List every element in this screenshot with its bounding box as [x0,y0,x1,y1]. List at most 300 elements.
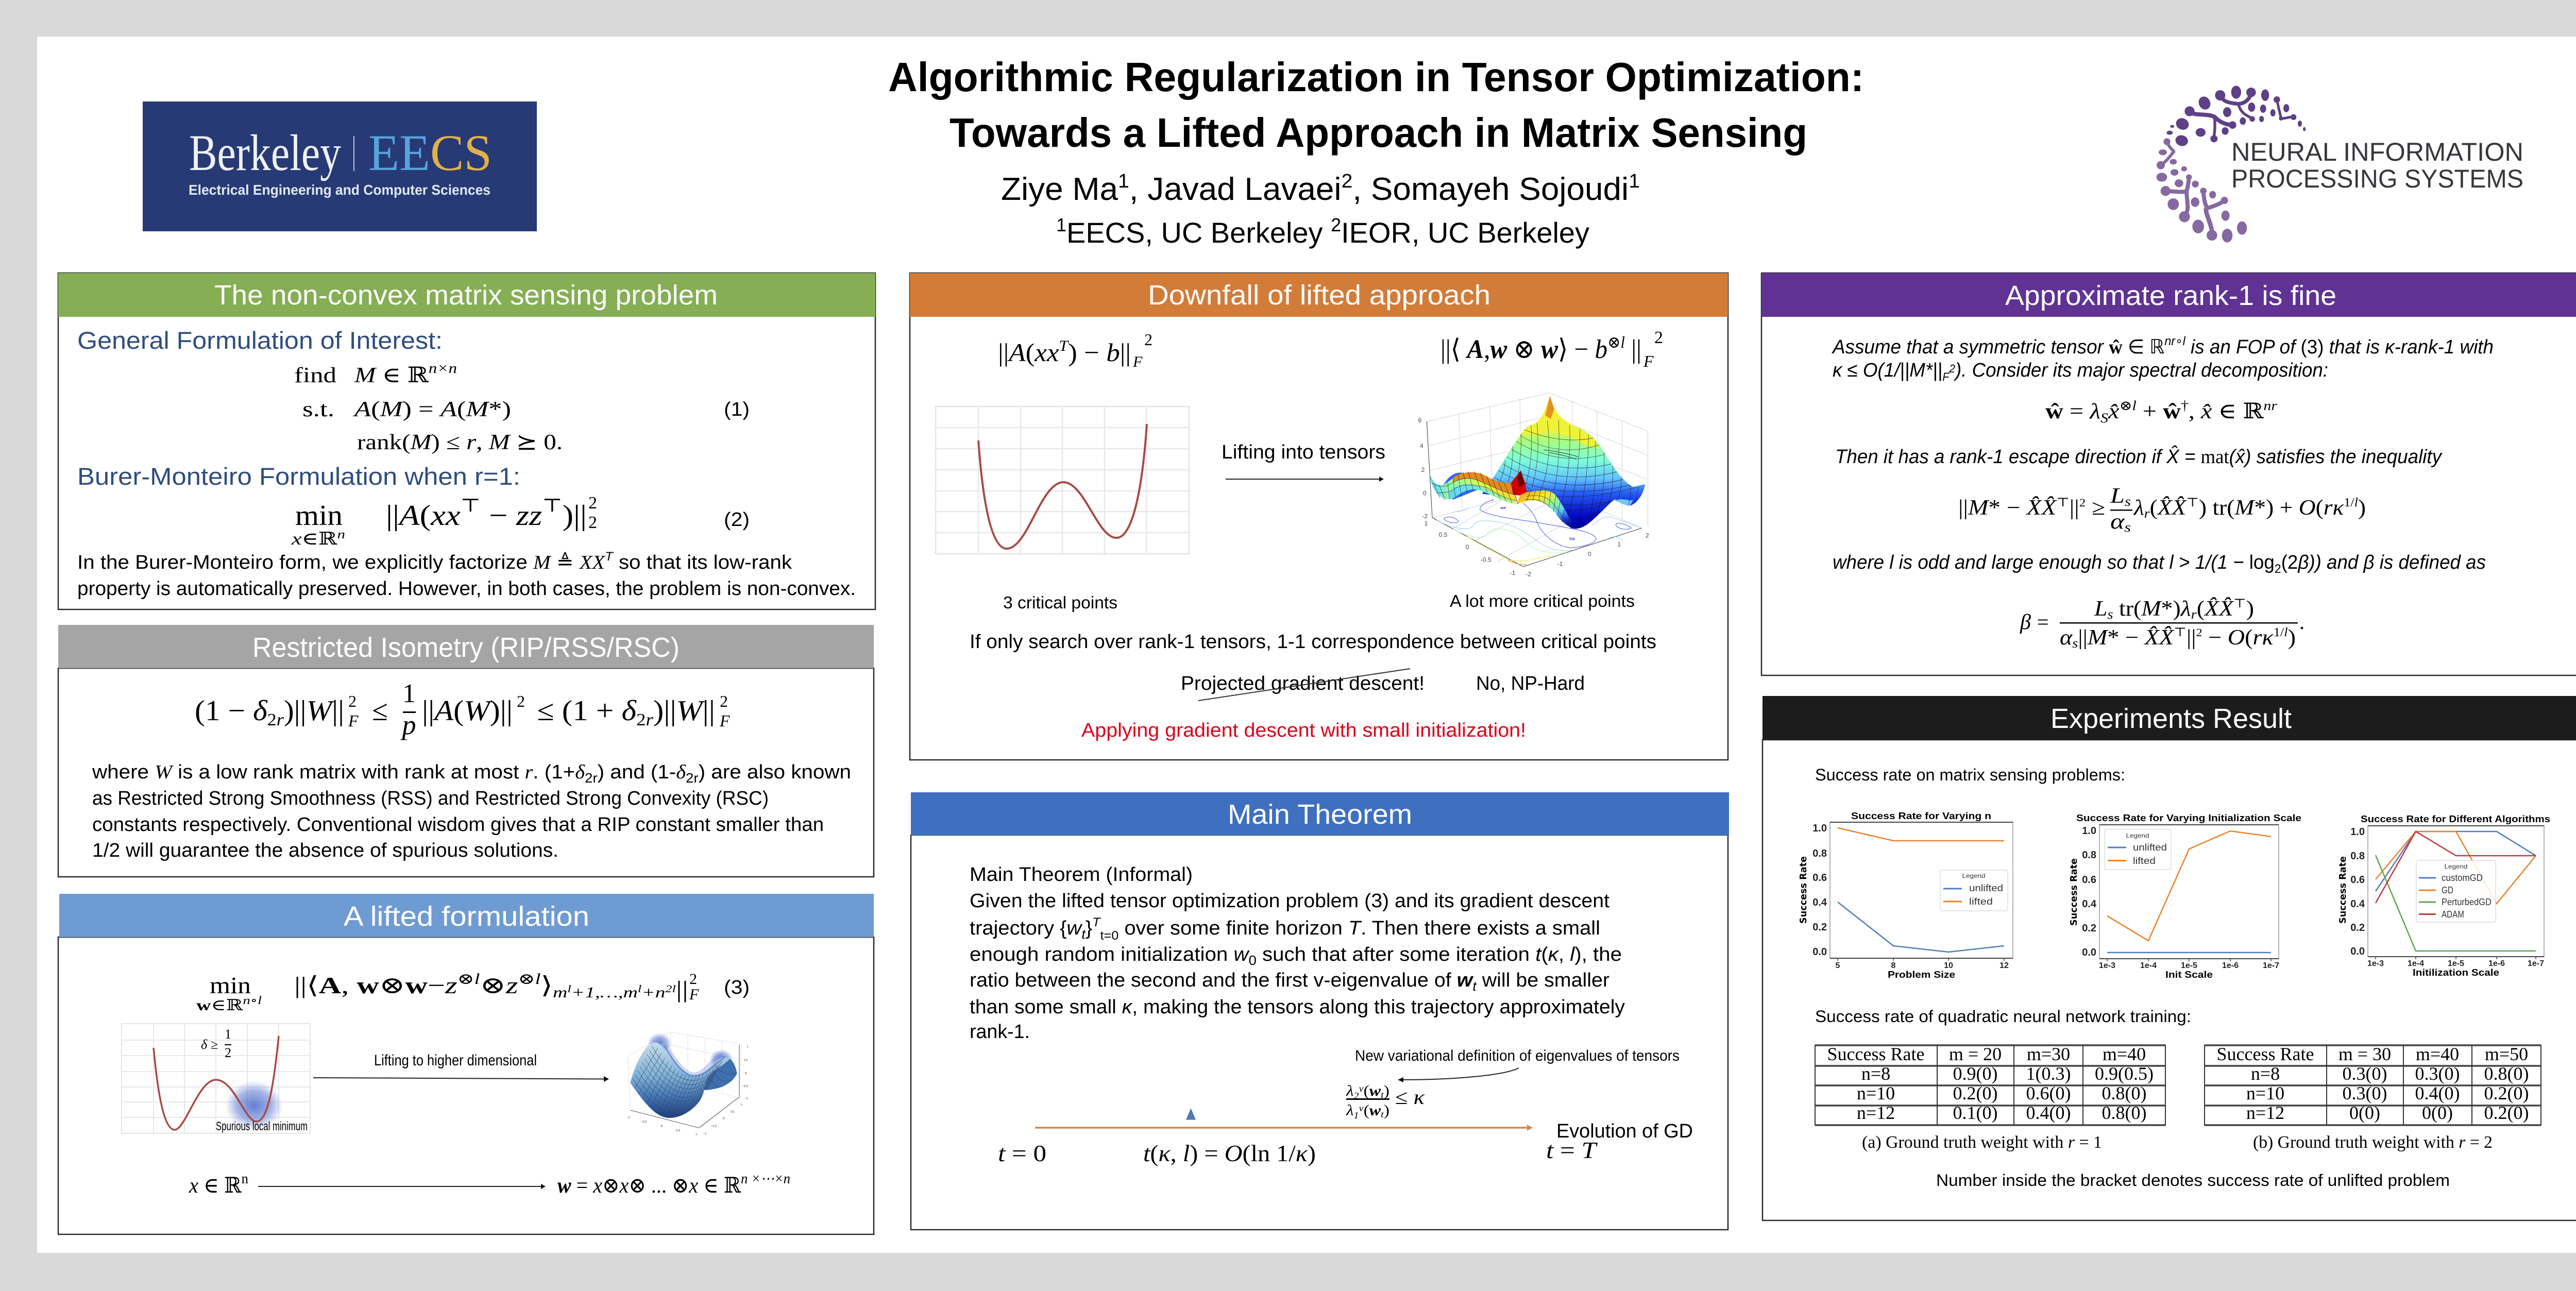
logo: Berkeley EECS: EE [368,124,430,181]
chart: success rate for varying n: 0.8 [1812,848,1827,859]
formula: eigenvalue ratio: v [1359,1083,1364,1094]
equation 2: )|| [562,500,587,532]
formula: eigenvalue ratio: ( [1364,1082,1369,1099]
affiliations: 2 [1331,214,1341,235]
chart: success rate for varying n: 8 [1891,961,1896,970]
theorem text: such that after some iteration [1257,944,1535,965]
formula: matrix objective: F [1132,353,1143,370]
table b: ground truth weight r=2: 0.3(0) [2343,1083,2387,1103]
table b: ground truth weight r=2: 0.2(0) [2484,1102,2529,1123]
formula: x to w lifting: n [242,1171,248,1187]
text: l odd and beta: β)) and β is defined as [2298,552,2493,573]
assumption text [1832,334,2494,383]
chart: lifted saddle surface: −1/2 [640,1120,647,1124]
chart: success rate for different algorithms: 0.0 [2350,946,2365,957]
RIP formula: )||W|| [284,695,344,727]
theorem text: 0 [1248,953,1257,968]
table a: ground truth weight r=1: 0.1(0) [1953,1102,1997,1123]
assumption text: nr∘l [2164,334,2185,348]
formula: eigenvalue ratio: t [1381,1109,1384,1119]
axis tick labels: -1 [1510,569,1516,576]
text: l odd and beta: 2 [2275,562,2281,576]
logo: Neural Information Processing Systems [2157,86,2523,243]
chart: success rate for varying n: 5 [1836,961,1840,970]
panel: restricted isometry [58,625,874,877]
chart: success rate for different algorithms: 1e-4 [2408,959,2424,968]
table a: ground truth weight r=1: m=30 [2027,1044,2070,1064]
equation 1 [294,361,563,454]
chart: lifted saddle surface: 0 [723,1117,725,1120]
chart: success rate for varying n: 0.0 [1812,946,1827,958]
chart: lifted saddle surface: −1 [626,1116,630,1119]
explanatory paragraph: where W is a low rank matrix with rank at most r. (1+δ [92,761,584,783]
affiliations: IEOR, UC Berkeley [1341,216,1589,249]
chart: lifted saddle surface: −1 [703,1132,706,1136]
equation 2: − [481,500,516,532]
panel: main theorem [911,792,1729,1230]
formula: matrix objective: ||A(xx [998,338,1058,367]
equation 3: || [676,976,688,1003]
caption b: (b) Ground truth weight with r = 2 [2253,1133,2493,1152]
axis tick labels [1418,417,1649,578]
table a: ground truth weight r=1: m = 20 [1949,1044,2002,1064]
header bar: green [58,273,875,317]
equation 1: s.t. [302,398,334,421]
chart: success rate for varying n: 0.2 [1812,922,1827,933]
formula: spectral decomposition: S [2100,411,2108,426]
main hill [1493,396,1645,529]
chart: lifted saddle surface: 0 [661,1124,663,1128]
text: escape direction: Then it has a rank-1 escape direction if X̂ = mat(x̂) satisfies the inequality [1835,445,2443,468]
chart: lifted saddle surface: 1 [747,1045,749,1048]
chart: success rate for varying initialization scale: 0.0 [2082,947,2096,958]
formula: inequality: || [2070,496,2079,520]
logo: Berkeley EECS: Electrical Engineering and Computer Sciences [189,182,490,198]
legend: unlifted [2133,842,2167,853]
text: l odd and beta: (2 [2281,552,2298,573]
formula: inequality: ≥ [2086,496,2105,520]
marker: triangle [1187,1109,1195,1119]
formula: inequality: s [2124,520,2131,535]
assumption text: κ ≤ O(1/||M*|| [1833,360,1946,381]
formula: inequality: λ [2133,496,2144,520]
table a: ground truth weight r=1: m=40 [2103,1044,2146,1064]
formula: inequality: ) [2358,496,2366,520]
formula: beta: − [2202,626,2228,650]
table b: ground truth weight r=2: 0.4(0) [2415,1083,2460,1103]
equation 1: A(M) = A(M*) [352,398,511,421]
formula: beta: ⊤ [2233,597,2246,610]
axis tick labels: 2 [1421,466,1425,473]
legend: Legend [1962,872,1986,879]
formula: tensor objective: 2 [1654,328,1663,347]
equation 2: ⊤ [461,495,481,516]
axis tick labels: -0.5 [1481,556,1492,564]
formula: inequality: 2 [2079,496,2086,509]
formula: spectral decomposition: x̂ [2108,400,2120,423]
legend: customGD [2442,873,2483,883]
formula: tensor objective [1440,328,1663,370]
formula: beta: M* − X̂X̂ [2088,626,2171,650]
subheading: matrix sensing: Success rate on matrix sensing problems: [1815,766,2125,784]
formula: eigenvalue ratio: w [1369,1082,1381,1099]
chart: lifted saddle surface: −1/2 [710,1124,717,1128]
theorem text: T [1092,915,1101,929]
chart: success rate for varying initialization scale: 0.2 [2082,923,2096,934]
chart: success rate for different algorithms: 0.8 [2350,851,2365,862]
highlight: spurious local minimum [225,1081,283,1130]
authors: , Somayeh Sojoudi [1352,172,1629,207]
axis tick labels: 0.5 [1439,531,1448,538]
explanatory paragraph: δ [676,761,686,783]
heading: The non-convex matrix sensing problem [214,280,718,311]
formula: eigenvalue ratio: ( [1364,1102,1369,1119]
chart: success rate for varying initialization scale [2069,813,2301,980]
chart: success rate for different algorithms: 0.6 [2350,874,2365,886]
formula: spectral decomposition: ŵ [2163,400,2181,423]
chart: lifted saddle surface: −1 [744,1097,748,1100]
theorem text: ratio between the second and the first v-eigenvalue of w [970,970,1472,991]
table b: ground truth weight r=2: m = 30 [2338,1044,2391,1064]
authors: 1 [1629,171,1640,192]
formula: tensor objective: F [1643,352,1654,370]
theorem text: } [1086,918,1092,939]
text: rank-1 correspondence: If only search over rank-1 tensors, 1-1 correspondence between critical points [970,631,1656,653]
formula: inequality: ) tr( [2199,496,2234,520]
chart: lifted saddle surface: 1 [740,1103,742,1107]
equation 3: m [553,983,676,1001]
legend [2416,860,2496,922]
formula: spectral decomposition: ⊗l [2119,398,2136,413]
formula: beta: M*)λ [2141,597,2190,621]
heading: Main Theorem [1228,799,1412,830]
chart: lifted tensor landscape 3D surface [1418,393,1649,578]
table a: ground truth weight r=1: 0.8(0) [2102,1083,2146,1103]
table b: ground truth weight r=2: m=40 [2416,1044,2459,1064]
equation 3: ⊗ l [518,971,539,988]
arrow: lifting to higher dimensional [313,1052,609,1082]
subheading: Burer-Monteiro: Burer-Monteiro Formulation when r=1: [77,463,520,490]
formula: beta: O(rκ [2228,626,2272,650]
formula: spectral decomposition: nr [2263,398,2278,413]
chart: success rate for different algorithms: 1e-7 [2528,959,2544,968]
equation 2: zz [516,500,543,532]
legend [1940,870,2008,911]
RIP formula: 2 [348,692,357,710]
table b: ground truth weight r=2: 0(0) [2349,1102,2380,1123]
chart: success rate for varying initialization scale: 1e-4 [2140,961,2157,970]
equation 1: n×n [429,361,457,377]
RIP formula: ||A(W)|| [422,695,513,727]
chart: success rate for varying n: 1.0 [1812,823,1827,834]
chart: success rate for varying initialization scale: 1e-6 [2222,961,2239,970]
table a: ground truth weight r=1: 0.9(0) [1953,1063,1997,1084]
panel: approximate rank-1 is fine [1761,273,2576,675]
RIP formula: 2r [636,710,653,729]
equation 1: find [294,364,336,387]
paragraph: so that its low-rank [613,552,792,573]
theorem text: over some finite horizon [1118,918,1348,939]
formula: spectral decomposition: † [2181,398,2189,413]
assumption text: Assume that a symmetric tensor ŵ ∈ ℝ [1833,336,2166,358]
explanatory paragraph [92,761,851,861]
equation number 2: (2) [724,509,750,531]
chart: success rate for different algorithms: 1.0 [2350,826,2365,838]
RIP formula: ≤ [372,695,388,727]
equation 2: min [295,500,343,532]
equation 3: +n [641,984,665,1001]
logo: Berkeley EECS: CS [430,124,492,181]
legend: lifted [2133,856,2156,866]
explanatory paragraph: constants respectively. Conventional wisdom gives that a RIP constant smaller than [92,814,824,836]
panel: a lifted formulation [58,894,874,1234]
RIP formula: (1 − δ [195,695,266,727]
chart: success rate for varying initialization scale: Success Rate [2069,858,2079,926]
formula: tensor objective: || [1625,335,1641,364]
chart: lifted saddle surface: −1/2 [742,1084,748,1088]
axis tick labels: 1 [1425,520,1428,527]
formula: beta: r [2191,607,2197,622]
equation 3: w∈ℝ [196,997,235,1014]
axis tick labels: -2 [1526,571,1531,578]
formula: beta: s [2108,607,2113,622]
formula: eigenvalue ratio: t [1381,1090,1384,1100]
legend: lifted [1969,896,1993,907]
formula: inequality: L [2110,484,2122,508]
explanatory paragraph: as Restricted Strong Smoothness (RSS) and Restricted Strong Convexity (RSC) [92,788,769,809]
legend: Legend [2126,832,2149,839]
axis tick labels: 4 [1420,442,1423,449]
RIP formula: p [400,709,416,740]
formula: spectral decomposition: , [2189,400,2201,423]
chart: success rate for different algorithms: 1e-3 [2367,959,2384,968]
equation 2: ⊤ [542,495,562,516]
arrow: to tensor [258,1184,546,1189]
authors: 2 [1342,171,1352,192]
annotation: variational definition: New variational definition of eigenvalues of tensors [1355,1047,1680,1064]
table b: ground truth weight r=2: n=12 [2246,1102,2284,1123]
arrow: lifting into tensors [1222,441,1385,482]
arrow: lifting to higher dimensional: Lifting to higher dimensional [374,1052,537,1069]
chart: success rate for different algorithms: 1e-5 [2448,959,2464,968]
text: no, NP-hard: No, NP-Hard [1476,673,1585,694]
formula: beta: s [2072,636,2078,651]
equation 3: 2l [665,983,676,995]
RIP formula: 1 [402,679,416,708]
RIP formula: F [719,711,730,730]
chart: lifted saddle surface: 1/2 [743,1058,748,1062]
equation 3: min [210,972,251,998]
chart: matrix landscape with 3 critical points [936,406,1189,554]
hill mesh [1494,420,1638,527]
chart: success rate for different algorithms: 0.2 [2350,922,2365,933]
table a: ground truth weight r=1: 0.2(0) [1953,1083,1997,1103]
theorem text: Given the lifted tensor optimization problem (3) and its gradient descent [970,890,1609,912]
table a: ground truth weight r=1: 0.9(0.5) [2095,1063,2154,1084]
formula: beta: L [2094,597,2108,621]
table b: ground truth weight r=2: 0.8(0) [2484,1063,2529,1084]
legend: Legend [2444,863,2468,870]
caption: a lot more critical points: A lot more critical points [1450,591,1635,610]
RIP formula: F [348,711,359,730]
heading: Restricted Isometry (RIP/RSS/RSC) [252,632,680,663]
table a: ground truth weight r=1: 1(0.3) [2026,1063,2071,1084]
equation number 1: (1) [724,399,750,420]
theorem text: t [1081,926,1087,942]
equation 3: ⟩ [540,972,553,998]
table b: ground truth weight r=2: 0.2(0) [2484,1083,2529,1103]
label: t(kappa,l): t(κ, l) = O(ln 1/κ) [1143,1140,1316,1166]
formula: inequality: r [2144,506,2150,521]
floor contours [1434,500,1642,565]
formula: beta: β [2020,610,2031,634]
logo: Berkeley EECS [143,101,537,231]
chart: success rate for different algorithms: Initilization Scale [2413,967,2499,978]
chart: success rate for different algorithms: 0.4 [2350,898,2365,910]
explanatory paragraph: 1/2 will guarantee the absence of spurious solutions. [92,840,558,861]
heading: Experiments Result [2050,703,2292,734]
formula: eigenvalue ratio: λ [1346,1102,1353,1119]
legend: PerturbedGD [2442,897,2492,907]
equation 3: z [505,972,518,998]
explanatory paragraph: 2r [585,770,598,786]
formula: inequality: M*) + O(rκ [2234,496,2342,520]
theorem text: rank-1. [970,1021,1030,1043]
axis tick labels: 6 [1418,417,1422,424]
table b: ground truth weight r=2: n=10 [2246,1083,2284,1103]
label: t = T: t = T [1546,1137,1598,1163]
authors: 1 [1118,171,1129,192]
header bar: blue [911,792,1729,836]
chart: success rate for varying initialization scale: Init Scale [2165,970,2213,980]
label: delta bound: 1 [225,1027,231,1042]
chart: success rate for different algorithms [2337,814,2550,978]
chart: success rate for varying initialization scale: 1e-3 [2099,961,2115,970]
table a: ground truth weight r=1: n=10 [1857,1083,1895,1103]
formula: matrix objective: T [1059,337,1070,354]
chart: success rate for varying initialization scale: 1e-5 [2181,961,2197,970]
formula: inequality: ||M* − X̂X̂ [1958,496,2053,520]
theorem text: enough random initialization w [970,944,1248,965]
affiliations: EECS, UC Berkeley [1066,216,1331,249]
formula: inequality [1958,484,2366,535]
heading: A lifted formulation [344,901,589,932]
formula: inequality: X̂X̂ [2157,496,2188,520]
assumption text: is an FOP of [2185,336,2301,358]
table b: ground truth weight r=2: 0.3(0) [2343,1063,2387,1084]
label: spurious local minimum: Spurious local minimum [216,1119,308,1133]
table a: ground truth weight r=1: Success Rate [1827,1044,1924,1064]
table b: ground truth weight r=2: Success Rate [2217,1044,2314,1064]
chart: success rate for varying n [1798,811,2013,980]
formula: matrix objective [998,330,1153,370]
formula: x to w lifting [189,1171,790,1198]
RIP formula: ≤ (1 + δ [537,695,635,727]
heading: Approximate rank-1 is fine [2005,280,2336,311]
theorem text: t [1472,978,1478,994]
arrow: lifting into tensors: Lifting into tensors [1222,441,1385,463]
equation 1: M ∈ ℝ [354,364,420,387]
formula: spectral decomposition: x̂ ∈ ℝ [2201,400,2257,423]
axes and dotted grid [1427,393,1648,562]
formula: eigenvalue ratio: ) [1384,1102,1389,1119]
formula: matrix objective: b|| [1106,338,1130,367]
equation 3: +1,…,m [571,984,638,1001]
formula: eigenvalue ratio: w [1369,1102,1381,1119]
formula: tensor objective: ||⟨ A,w ⊗ w⟩ − b [1440,335,1608,364]
chart: success rate for varying n: 10 [1944,961,1953,970]
chart: success rate for varying initialization scale: 0.6 [2082,874,2096,886]
paragraph: T [605,550,614,564]
theorem text: trajectory {w [970,918,1081,939]
panel: experiments result [1762,696,2576,1220]
theorem text: Main Theorem (Informal) [970,864,1193,886]
title [888,54,1864,156]
table b: ground truth weight r=2: 0.3(0) [2415,1063,2460,1084]
axis tick labels: -2 [1422,513,1428,520]
affiliations: 1 [1056,214,1066,235]
formula: beta: 2 [2196,626,2202,639]
formula: beta: α [2060,626,2073,650]
formula: eigenvalue ratio: ≤ κ [1395,1085,1425,1109]
formula: inequality: ⊤ [2056,496,2070,509]
title: Algorithmic Regularization in Tensor Optimization: [888,54,1864,100]
text: projected gradient descent struck through [1181,669,1425,701]
text: conclusion in red: Applying gradient descent with small initialization! [1081,720,1526,741]
header bar: light blue [59,894,874,937]
assumption text: 2 [1948,362,1955,375]
RIP formula [195,679,730,740]
RIP formula: 2r [267,710,283,729]
icon: neural dot crescent [2157,86,2306,243]
assumption text: F [1942,370,1950,383]
authors: , Javad Lavaei [1129,172,1342,207]
formula: x to w lifting: w = x⊗x⊗ ... ⊗x ∈ ℝ [557,1174,743,1198]
explanatory paragraph: ) are also known [699,761,851,783]
chart: success rate for varying n: Success Rate [1798,856,1809,924]
paragraph [77,550,856,600]
panel: the non-convex matrix sensing problem [58,273,875,609]
chart: lifted saddle surface [626,1032,749,1136]
header bar: purple [1761,273,2576,317]
legend [2105,829,2171,870]
chart: success rate for different algorithms: Success Rate [2337,856,2348,924]
formula: eigenvalue ratio [1346,1082,1425,1120]
table a: ground truth weight r=1: n=12 [1857,1102,1895,1123]
caption a: (a) Ground truth weight with r = 1 [1862,1133,2102,1152]
equation number 3: (3) [724,977,750,998]
text: l odd and beta: where l is odd and large enough so that l > 1/(1 − log [1833,552,2275,573]
formula: beta: ⊤ [2174,626,2187,639]
formula: beta: tr( [2113,597,2141,621]
equation 1: rank( M) ≤ r, M ⪰ 0. [357,431,563,454]
equation 2 [291,494,597,549]
chart: success rate for varying n: 0.4 [1812,897,1827,908]
explanatory paragraph: 2r [686,770,699,786]
legend: unlifted [1969,883,2003,893]
table a: ground truth weight r=1: n=8 [1861,1063,1890,1084]
legend: GD [2442,885,2453,895]
formula: inequality: s [2125,494,2131,509]
chart: success rate for varying initialization scale: 0.4 [2082,898,2097,910]
table a: ground truth weight r=1: 0.4(0) [2026,1102,2071,1123]
table a: ground truth weight r=1: 0.8(0) [2102,1102,2146,1123]
theorem text: will be smaller [1477,970,1609,991]
axis tick labels: 0 [1423,489,1427,497]
caption: 3 critical points: 3 critical points [1003,593,1117,612]
theorem text: t=0 [1100,929,1118,943]
equation 3: l [567,983,571,995]
